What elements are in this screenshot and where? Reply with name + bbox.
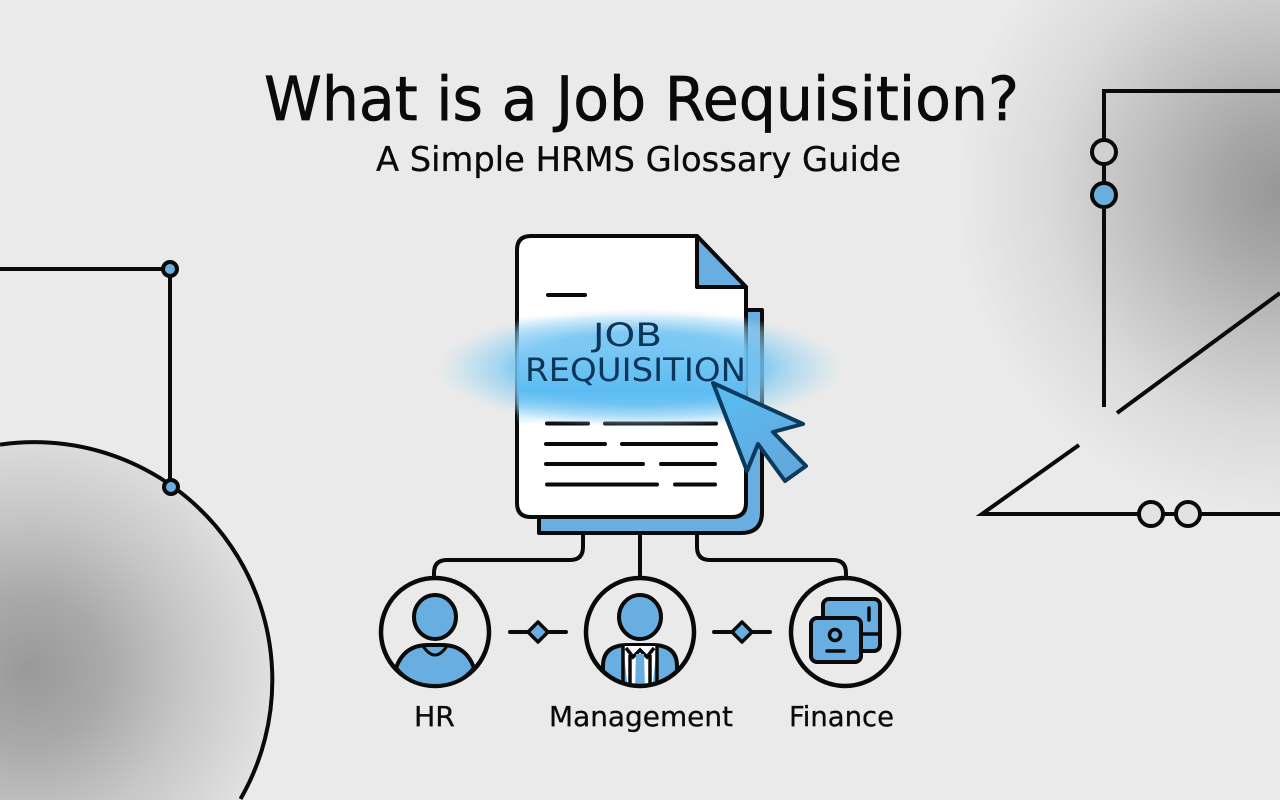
link diamond 2 (714, 622, 770, 642)
subtitle: A Simple HRMS Glossary Guide (376, 140, 901, 180)
page fold (697, 236, 746, 287)
decoration: left circle with connector (0, 262, 273, 800)
highlight band (515, 315, 748, 425)
link diamond 1 (510, 622, 566, 642)
document label: JOB (591, 316, 662, 354)
department: Finance: Finance (789, 700, 894, 733)
background shading: top right (950, 0, 1280, 525)
connectors: document to departments (434, 530, 846, 578)
department: HR: HR (414, 700, 455, 733)
icon: cursor arrow (713, 383, 806, 481)
department: Finance (789, 578, 899, 733)
department: Management: Management (549, 700, 733, 733)
back page (539, 310, 762, 533)
department: Management (549, 578, 733, 733)
front page (517, 236, 746, 517)
document text lines (546, 295, 716, 484)
document illustration (436, 236, 844, 533)
title: What is a Job Requisition? (264, 64, 1019, 135)
decoration: right circuit lines (982, 91, 1280, 526)
department: HR (381, 578, 489, 733)
highlight glow (436, 308, 844, 428)
document label: REQUISITION (525, 351, 746, 389)
